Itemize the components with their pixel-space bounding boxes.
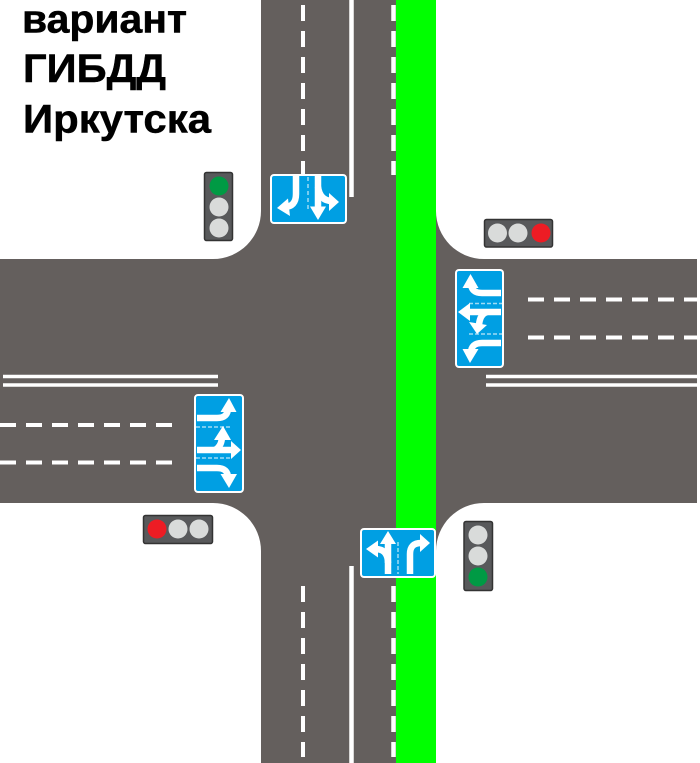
traffic light: south-east, green [464, 522, 492, 590]
traffic light: south-west, red [144, 516, 212, 544]
traffic light: north-west, green [204, 172, 232, 240]
sign: north approach lanes [271, 175, 346, 223]
north road markings [303, 0, 394, 197]
traffic light: north-east, red [484, 220, 552, 247]
south road markings [303, 566, 394, 763]
west road markings [0, 376, 218, 462]
sign: south approach lanes [361, 529, 435, 577]
title: Иркутска [23, 98, 212, 142]
title [22, 0, 212, 142]
sign: east approach lanes [456, 270, 503, 367]
title: ГИБДД [23, 47, 166, 91]
sign: west approach lanes [195, 395, 243, 492]
east road markings [486, 300, 697, 385]
green dedicated lane [396, 0, 436, 763]
